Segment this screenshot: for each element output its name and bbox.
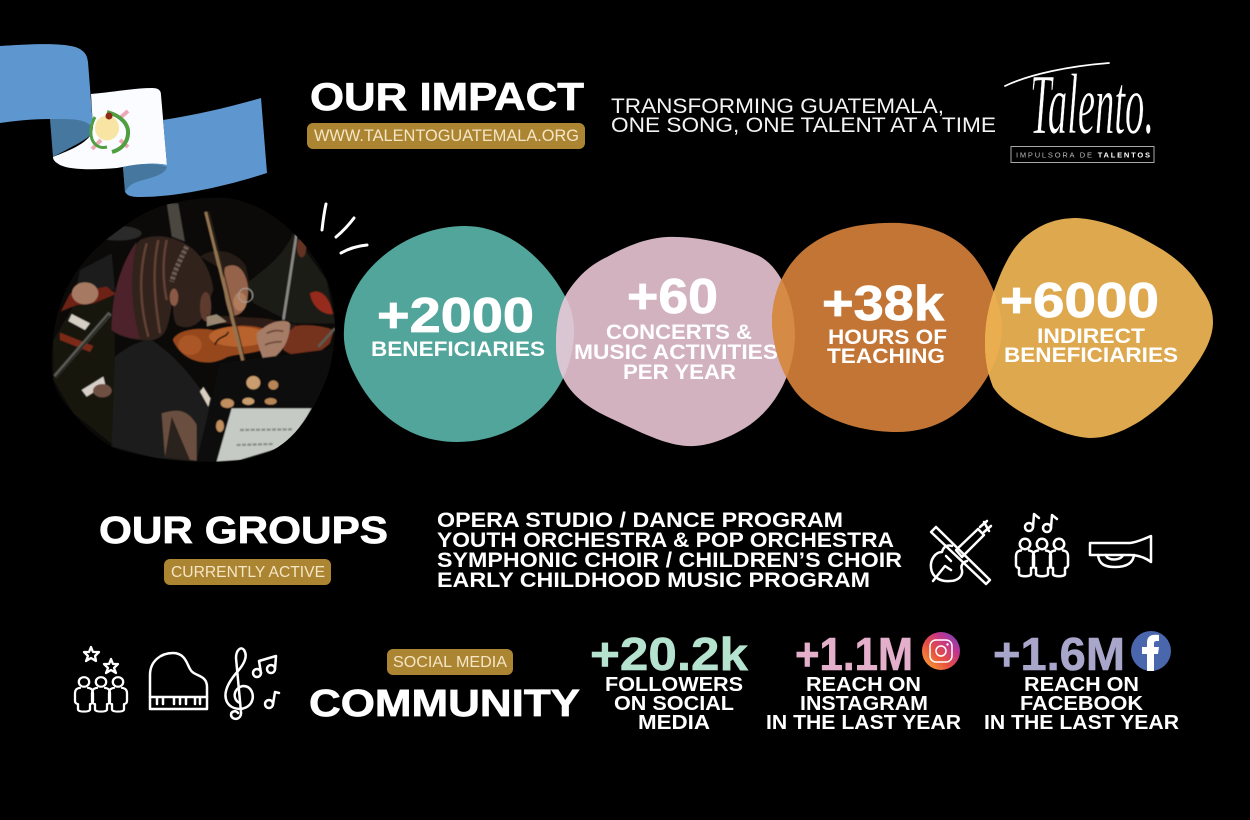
social media pill: SOCIAL MEDIA [393,654,508,671]
stat blob: concerts: PER YEAR [623,361,736,384]
group list: OPERA STUDIO / DANCE PROGRAM [437,509,843,532]
icon: choir with stars [75,647,127,712]
sheet music [217,408,312,462]
hand [257,321,290,361]
stat blob: concerts: CONCERTS & [606,321,752,344]
currently active pill [164,559,331,585]
stat blob: indirect beneficiaries: BENEFICIARIES [1004,344,1178,367]
icon: trumpet [1090,536,1151,567]
icon: Guatemala flag ribbon [0,44,267,197]
heading: our groups: OUR GROUPS [99,510,388,552]
stat: instagram reach: +1.1M [795,628,913,680]
tagline: TRANSFORMING GUATEMALA, [611,95,944,118]
stat: facebook reach: IN THE LAST YEAR [984,712,1180,734]
group list: SYMPHONIC CHOIR / CHILDREN’S CHOIR [437,549,902,572]
heading: community: COMMUNITY [309,683,580,725]
icon: grand piano [150,653,207,709]
tagline [611,95,996,137]
website pill: WWW.TALENTOGUATEMALA.ORG [314,126,579,145]
group list: EARLY CHILDHOOD MUSIC PROGRAM [437,569,870,592]
icon: coat of arms [91,111,128,152]
stat: social followers: ON SOCIAL [614,693,734,715]
stat blob: beneficiaries: BENEFICIARIES [371,338,545,361]
stat blob: beneficiaries [344,226,574,442]
accent marks [322,204,367,253]
stat: social followers: +20.2k [590,628,748,680]
group list [437,509,902,592]
group list: YOUTH ORCHESTRA & POP ORCHESTRA [437,529,894,552]
first violinist hair [112,236,213,340]
far violin [283,325,334,356]
stat: instagram reach: INSTAGRAM [800,693,928,715]
logo: Talento: IMPULSORA DE TALENTOS [1016,150,1150,160]
music stand [197,348,335,462]
icon: treble clef and notes [225,648,279,719]
social media pill [387,649,513,675]
currently active pill: CURRENTLY ACTIVE [171,564,325,581]
tagline: ONE SONG, ONE TALENT AT A TIME [611,114,996,137]
stat blob: hours: HOURS OF [828,326,947,349]
stat blob: concerts [556,237,795,446]
icon: instagram [922,632,960,670]
stat: instagram reach: IN THE LAST YEAR [766,712,962,734]
stat: facebook reach: REACH ON [1024,674,1139,696]
stat: facebook reach: FACEBOOK [1020,693,1144,715]
stat blob: hours [772,222,994,432]
stat blob: hours: +38k [822,277,945,331]
icon: choir with notes [1016,514,1068,576]
stat: social followers: FOLLOWERS [605,674,743,696]
stat blob: hours: TEACHING [827,345,945,368]
stat blob: indirect beneficiaries [985,218,1213,438]
second violinist [247,233,335,323]
photo: violinists [52,198,335,462]
stat: instagram reach: REACH ON [806,674,921,696]
bow [206,212,243,363]
stat: instagram reach [766,628,962,734]
stat: facebook reach: +1.6M [993,628,1125,680]
main violin [173,325,272,363]
title: our impact: OUR IMPACT [310,76,584,119]
stat: facebook reach [984,628,1180,734]
stat blob: indirect beneficiaries: INDIRECT [1037,325,1145,348]
dress [112,340,210,462]
icon: violin and bow [931,521,991,584]
logo: Talento [1005,56,1154,162]
stat blob: concerts: MUSIC ACTIVITIES [574,341,778,364]
stat: social followers: MEDIA [638,712,710,734]
stat blob: beneficiaries: +2000 [377,289,534,343]
stat blob: indirect beneficiaries: +6000 [1000,274,1159,328]
stat: social followers [590,628,748,734]
stat blob: concerts: +60 [627,270,718,324]
icon: facebook [1131,631,1171,671]
